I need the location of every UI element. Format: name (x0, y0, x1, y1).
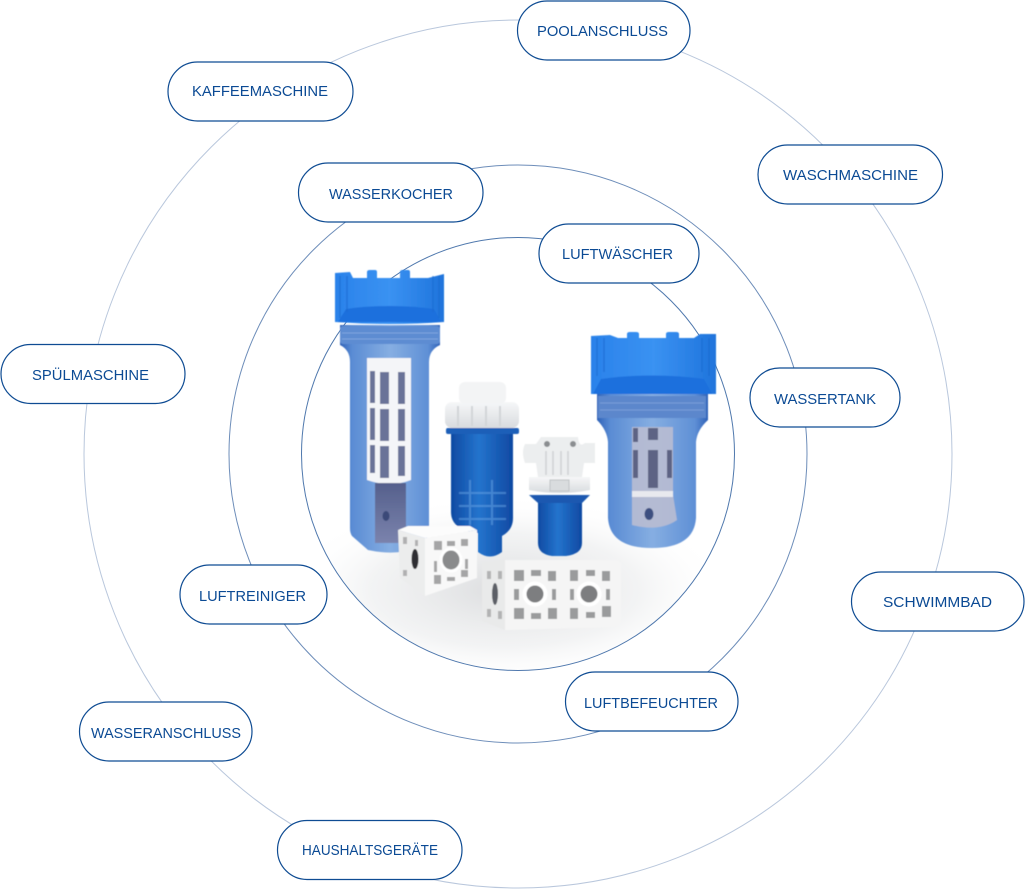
cartridge (632, 427, 677, 528)
label: Spülmaschine (1, 344, 185, 404)
label: Wasserkocher: WASSERKOCHER (329, 186, 453, 203)
label: Waschmaschine (758, 145, 942, 204)
label: Wassertank: WASSERTANK (774, 391, 876, 408)
label: Luftwäscher: LUFTWÄSCHER (562, 246, 673, 263)
label: Schwimmbad: SCHWIMMBAD (883, 594, 992, 611)
white cube block (398, 526, 477, 596)
large filter housing (335, 270, 444, 553)
product shadow (353, 526, 656, 654)
inner ring (302, 238, 734, 670)
middle ring (229, 165, 807, 743)
label: Wassertank (750, 368, 900, 427)
label: Luftreiniger (180, 565, 327, 624)
product group: water filters (335, 270, 716, 630)
label: Wasserkocher (298, 163, 483, 222)
label: Spülmaschine: SPÜLMASCHINE (32, 366, 149, 384)
label: Waschmaschine: WASCHMASCHINE (783, 167, 918, 184)
label: Schwimmbad (852, 572, 1024, 631)
label: Luftbefeuchter: LUFTBEFEUCHTER (584, 695, 718, 712)
label: Kaffeemaschine (168, 62, 353, 121)
label: Wasseranschluss: WASSERANSCHLUSS (91, 725, 241, 742)
medium filter housing (591, 332, 716, 548)
small blue filter (445, 382, 519, 556)
label: Wasseranschluss (80, 702, 252, 761)
label: Kaffeemaschine: KAFFEEMASCHINE (192, 83, 328, 100)
white rectangular block (482, 560, 621, 630)
label: Haushaltsgeräte (278, 820, 462, 880)
label: Luftbefeuchter (566, 672, 738, 731)
label: Poolanschluss (518, 1, 690, 60)
label: Haushaltsgeräte: HAUSHALTSGERÄTE (302, 842, 438, 859)
label: Luftwäscher (539, 224, 699, 283)
cage (367, 358, 411, 484)
label: Poolanschluss: POOLANSCHLUSS (537, 23, 668, 40)
label: Luftreiniger: LUFTREINIGER (199, 588, 306, 605)
compact white-head filter (523, 437, 595, 556)
